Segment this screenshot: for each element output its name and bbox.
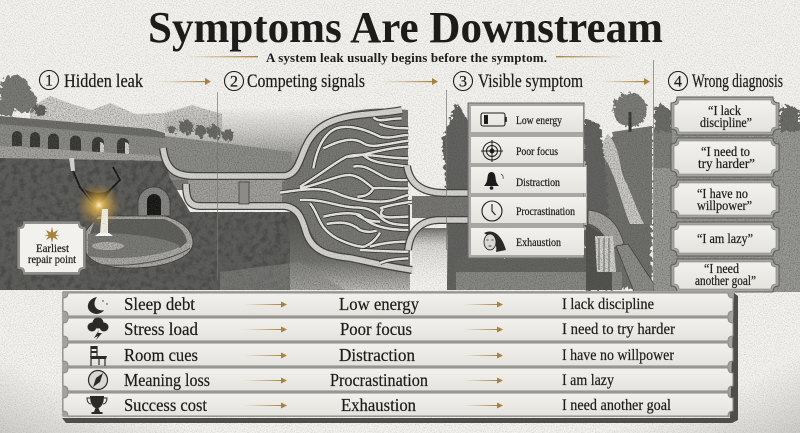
channel between pipes <box>188 180 288 204</box>
arrow <box>244 302 287 308</box>
table row: success cost: Success cost <box>124 395 207 415</box>
symptom row: distraction <box>471 167 586 193</box>
front stones <box>86 248 190 265</box>
tree trunk <box>628 112 632 132</box>
table row: meaning loss: I am lazy <box>562 372 614 389</box>
diagnosis card: I am lazy: “I am lazy” <box>697 232 753 247</box>
icon: battery <box>481 113 507 126</box>
left tree <box>0 75 46 116</box>
icon: clock <box>482 201 502 221</box>
step 1 heading: 1 <box>45 72 53 90</box>
table row: success cost: Exhaustion <box>341 395 416 415</box>
icon: chair <box>90 346 107 366</box>
aqueduct <box>0 116 165 162</box>
arrow 1 <box>158 78 211 85</box>
niche <box>138 187 170 216</box>
underground earth <box>0 158 300 290</box>
symptom row: low energy: Low energy <box>516 113 562 127</box>
callout: earliest repair point: repair point <box>28 254 77 266</box>
stone channel wall <box>586 210 654 292</box>
diagnosis card: I need to try harder: “I need to <box>701 145 750 160</box>
pool wall <box>85 216 193 268</box>
earth right of the white gap <box>447 220 471 290</box>
step 1 heading: Hidden leak <box>64 71 143 92</box>
branches <box>280 117 413 263</box>
icon: moon <box>88 297 108 314</box>
table row: meaning loss: Procrastination <box>330 370 428 390</box>
diagram: right column ground <box>654 104 800 292</box>
fog gap <box>412 228 448 290</box>
diagnosis card: I have no willpower: willpower” <box>697 199 752 214</box>
step 2 heading: 2 <box>230 74 238 90</box>
stream <box>603 134 644 224</box>
mountains <box>30 96 222 132</box>
bank foliage <box>612 126 652 225</box>
subtitle: A system leak usually begins before the symptom. <box>266 50 547 65</box>
title: Symptoms Are Downstream <box>148 3 663 52</box>
panel: wrong diagnoses <box>671 97 779 292</box>
bushes <box>168 120 234 141</box>
table row: meaning loss: Meaning loss <box>124 370 210 390</box>
symptom row: low energy <box>471 106 583 132</box>
arrow 3 <box>600 78 650 85</box>
callout: earliest repair point: Earliest <box>36 243 70 255</box>
diagram: cracked source and pool <box>69 158 193 268</box>
icon: trophy <box>87 396 107 414</box>
icon: storm cloud <box>88 318 108 340</box>
back wall <box>90 219 187 248</box>
arrow <box>464 302 503 308</box>
foreground grass <box>456 272 622 290</box>
symptom row: exhaustion: Exhaustion <box>516 235 561 249</box>
table row: stress load: Poor focus <box>340 319 412 339</box>
table row: meaning loss <box>63 368 733 391</box>
panel: mapping table <box>62 291 738 423</box>
table row: stress load: Stress load <box>124 319 198 339</box>
icon: tired face <box>484 232 506 252</box>
step 4 heading <box>668 71 783 92</box>
earth under the network <box>290 205 410 290</box>
foliage below panel <box>456 256 590 276</box>
diagnosis card: I am lazy <box>671 222 779 256</box>
table row: room cues <box>63 343 733 366</box>
diagram: pipe network <box>163 108 472 270</box>
waterfall <box>100 209 108 233</box>
lower pipe <box>186 184 412 270</box>
step 3 heading <box>454 71 583 92</box>
upper pipe <box>163 110 402 176</box>
arrow <box>244 352 287 358</box>
icon: target <box>481 140 503 162</box>
symptom row: exhaustion <box>471 228 584 255</box>
arrow <box>244 402 287 408</box>
table row: sleep debt <box>63 293 733 316</box>
table row: room cues: Distraction <box>339 345 415 365</box>
symptom row: distraction: Distraction <box>516 175 560 189</box>
icon: gold star <box>44 227 60 243</box>
diagnosis card: I lack discipline: “I lack <box>708 104 741 119</box>
arrow <box>244 378 287 384</box>
table row: stress load <box>63 318 733 341</box>
symptom row: poor focus <box>471 137 583 163</box>
symptom row: poor focus: Poor focus <box>516 144 558 158</box>
symptom row: procrastination <box>471 197 586 223</box>
trees behind symptoms <box>442 93 652 290</box>
diagnosis card: I need another goal: another goal” <box>695 274 756 289</box>
panel: visible symptoms <box>468 103 587 258</box>
diagnosis card: I have no willpower <box>671 180 779 218</box>
step 2 heading: Competing signals <box>247 71 365 92</box>
arrow <box>464 352 503 358</box>
table row: room cues: I have no willpower <box>562 347 675 364</box>
table row: sleep debt: Sleep debt <box>124 294 195 314</box>
crack <box>73 167 120 207</box>
table row: room cues: Room cues <box>124 345 198 365</box>
step 4 heading: 4 <box>674 74 682 90</box>
table row: sleep debt: Low energy <box>339 294 419 314</box>
table row: success cost: I need another goal <box>562 397 671 414</box>
outgoing pipes <box>407 166 472 250</box>
panel: landscape scene <box>0 75 654 292</box>
icon: compass <box>88 370 108 390</box>
arrow <box>464 378 503 384</box>
arrow <box>464 402 503 408</box>
diagnosis card: I have no willpower: “I have no <box>697 187 748 202</box>
diagnosis card: I need to try harder <box>671 138 779 177</box>
arrow <box>464 326 503 332</box>
network bed <box>282 108 408 270</box>
glow <box>77 183 121 227</box>
symptom row: procrastination: Procrastination <box>516 204 575 218</box>
table row: stress load: I need to try harder <box>562 321 676 338</box>
outgoing band <box>412 196 472 218</box>
diagnosis card: I need to try harder: try harder” <box>698 157 755 172</box>
step 1 heading <box>40 70 143 92</box>
table row: sleep debt: I lack discipline <box>562 296 654 313</box>
table row: success cost <box>63 393 733 416</box>
arrow <box>244 326 287 332</box>
diagnosis card: I need another goal <box>671 259 779 292</box>
hills and field <box>165 108 405 190</box>
diagnosis card: I need another goal: “I need <box>704 262 739 277</box>
diagnosis card: I lack discipline <box>671 97 779 135</box>
vertical dividers <box>218 60 654 290</box>
diagnosis card: I lack discipline: discipline” <box>700 116 752 131</box>
step 3 heading: Visible symptom <box>478 71 583 92</box>
callout: earliest repair point <box>17 221 86 275</box>
arrow 2 <box>380 78 438 85</box>
pool water <box>88 233 180 258</box>
step 3 heading: 3 <box>459 74 467 90</box>
leak trickle <box>69 158 75 171</box>
connector strut <box>239 182 249 204</box>
meadow <box>165 136 292 180</box>
icon: bell <box>484 172 503 190</box>
